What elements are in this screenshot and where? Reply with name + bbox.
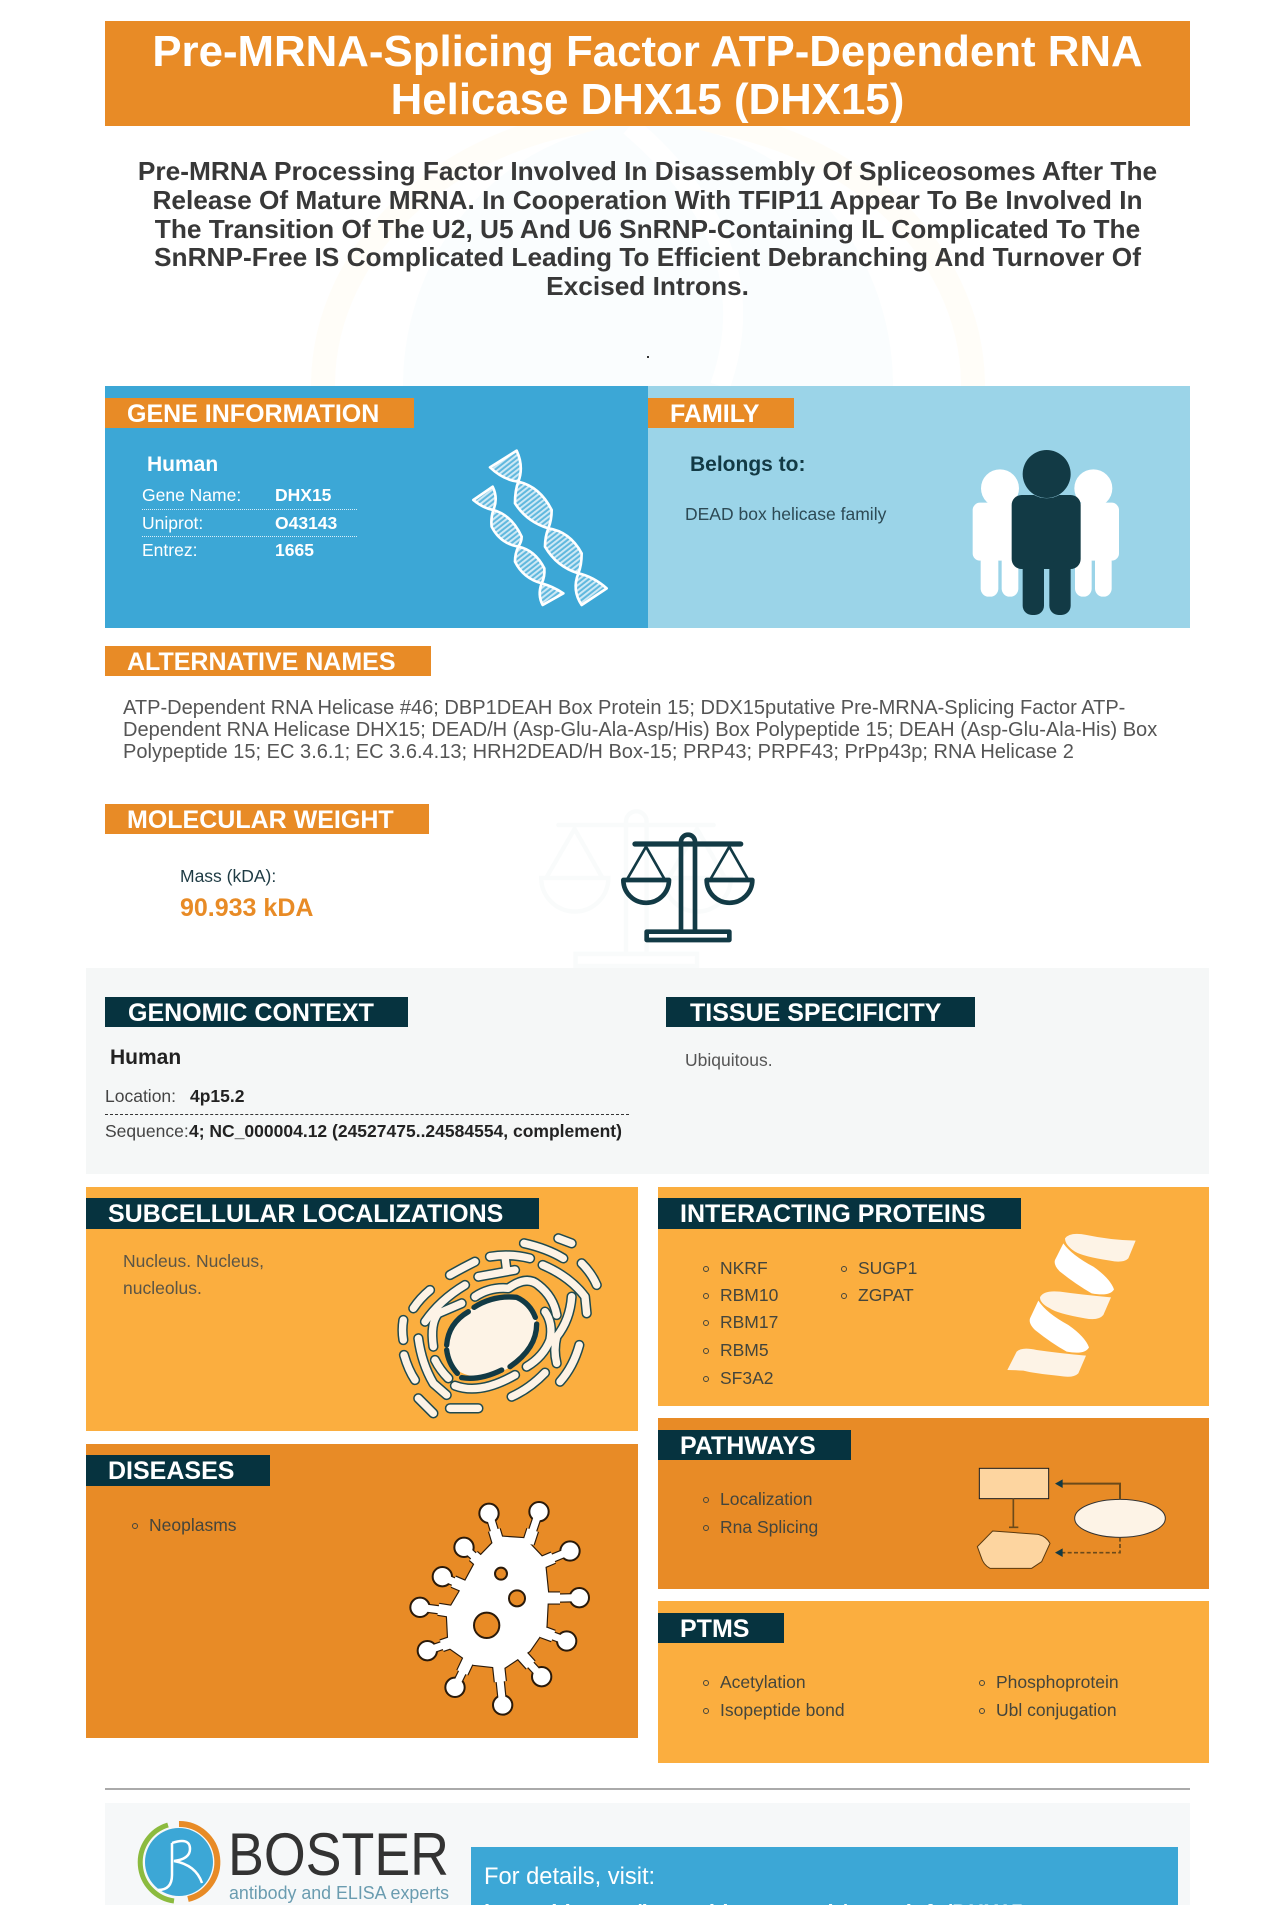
icon: dna — [472, 449, 608, 606]
protein list: SF3A2 — [720, 1368, 774, 1388]
ptm list: Ubl conjugation — [996, 1700, 1117, 1720]
protein list: RBM5 — [720, 1340, 769, 1360]
localization text — [123, 1251, 264, 1298]
title banner: Helicase DHX15 (DHX15) — [391, 75, 904, 124]
heading: alternative names: ALTERNATIVE NAMES — [127, 648, 396, 676]
heading: tissue specificity: TISSUE SPECIFICITY — [690, 999, 941, 1027]
location label: Location: — [105, 1086, 176, 1106]
species label: Human — [147, 453, 218, 476]
protein list: NKRF — [720, 1258, 768, 1278]
protein list — [703, 1258, 917, 1388]
localization text: nucleolus. — [123, 1278, 202, 1298]
pathway list — [703, 1489, 818, 1537]
logo: boster — [138, 1821, 449, 1904]
gene name row: Gene Name: — [142, 485, 241, 505]
details box — [471, 1847, 1178, 1905]
alternative names text: Dependent RNA Helicase DHX15; DEAD/H (Asp-Glu-Ala-Asp/His) Box Polypeptide 15; DEAH (Asp-Glu-Ala-His) Box — [123, 719, 1157, 741]
panel: family — [648, 386, 1190, 628]
protein list: RBM17 — [720, 1312, 778, 1332]
panel: ptms — [658, 1601, 1209, 1763]
uniprot row: Uniprot: — [142, 513, 203, 533]
mass value: 90.933 kDA — [180, 894, 313, 922]
icon: virus — [409, 1501, 590, 1716]
alternative names text: Polypeptide 15; EC 3.6.1; EC 3.6.4.13; HRH2DEAD/H Box-15; PRP43; PRPF43; PrPp43p; RNA Helicase 2 — [123, 741, 1074, 763]
description: SnRNP-Free IS Complicated Leading To Efficient Debranching And Turnover Of — [154, 242, 1141, 272]
uniprot value: O43143 — [275, 513, 337, 533]
description: The Transition Of The U2, U5 And U6 SnRNP-Containing IL Complicated To The — [155, 214, 1140, 244]
entrez row: Entrez: — [142, 540, 197, 560]
heading: family: FAMILY — [670, 400, 759, 428]
icon: cell nucleus — [397, 1233, 602, 1418]
description: Pre-MRNA Processing Factor Involved In Disassembly Of Spliceosomes After The — [138, 156, 1157, 186]
disease list: Neoplasms — [149, 1515, 237, 1535]
heading: family — [648, 398, 794, 428]
sequence label: Sequence: — [105, 1121, 189, 1141]
panel: genomic context and tissue specificity — [86, 968, 1209, 1174]
panel: footer — [105, 1803, 1190, 1905]
localization text: Nucleus. Nucleus, — [123, 1251, 264, 1271]
heading: subcellular localizations: SUBCELLULAR LOCALIZATIONS — [108, 1200, 503, 1228]
heading: pathways: PATHWAYS — [680, 1432, 816, 1460]
panel: interacting proteins — [658, 1187, 1209, 1406]
panel: subcellular localizations — [86, 1187, 638, 1431]
heading: genomic context: GENOMIC CONTEXT — [128, 999, 374, 1027]
alternative names text — [123, 697, 1157, 763]
icon: ghost scales — [520, 800, 780, 980]
background watermark logo — [300, 126, 1000, 386]
gene name value: DHX15 — [275, 485, 331, 505]
description — [138, 156, 1157, 301]
panel: pathways — [658, 1418, 1209, 1589]
heading: interacting proteins: INTERACTING PROTEINS — [680, 1200, 986, 1228]
ptm list: Isopeptide bond — [720, 1700, 845, 1720]
pathway list: Localization — [720, 1489, 812, 1509]
heading: diseases — [86, 1455, 270, 1486]
pathway list: Rna Splicing — [720, 1517, 818, 1537]
panel: gene information — [105, 386, 648, 628]
alternative names text: ATP-Dependent RNA Helicase #46; DBP1DEAH Box Protein 15; DDX15putative Pre-MRNA-Splicing Factor ATP- — [123, 697, 1125, 719]
icon: protein helix — [1007, 1234, 1136, 1377]
heading: gene information: GENE INFORMATION — [127, 400, 379, 428]
heading: diseases: DISEASES — [108, 1457, 234, 1485]
protein list: RBM10 — [720, 1285, 778, 1305]
description: Excised Introns. — [546, 271, 749, 301]
details label: For details, visit: — [484, 1864, 655, 1890]
ptm list: Acetylation — [720, 1672, 806, 1692]
location value: 4p15.2 — [190, 1086, 244, 1106]
ptm list: Phosphoprotein — [996, 1672, 1119, 1692]
tissue text: Ubiquitous. — [685, 1050, 773, 1070]
protein list: ZGPAT — [858, 1285, 914, 1305]
icon: scales — [621, 832, 755, 942]
ptm list — [703, 1672, 1119, 1720]
heading: pathways — [658, 1430, 851, 1460]
sequence value: 4; NC_000004.12 (24527475..24584554, complement) — [189, 1121, 622, 1141]
protein list: SUGP1 — [858, 1258, 917, 1278]
entrez value: 1665 — [275, 540, 314, 560]
title banner — [105, 21, 1190, 126]
title banner: Pre-MRNA-Splicing Factor ATP-Dependent RNA — [152, 27, 1143, 76]
icon: pathway diagram — [976, 1468, 1166, 1569]
small dot — [647, 356, 649, 358]
heading: ptms: PTMS — [680, 1615, 749, 1643]
icon: people — [972, 450, 1119, 615]
species label: Human — [110, 1046, 181, 1069]
logo: boster: BOSTER — [228, 1821, 449, 1888]
heading: molecular weight: MOLECULAR WEIGHT — [127, 806, 394, 834]
family name: DEAD box helicase family — [685, 504, 886, 524]
panel: diseases — [86, 1444, 638, 1738]
description: Release Of Mature MRNA. In Cooperation With TFIP11 Appear To Be Involved In — [152, 185, 1143, 215]
belongs to label: Belongs to: — [690, 453, 806, 476]
heading: ptms — [658, 1613, 784, 1643]
mass label: Mass (kDA): — [180, 866, 276, 886]
logo: boster: antibody and ELISA experts — [229, 1883, 449, 1903]
